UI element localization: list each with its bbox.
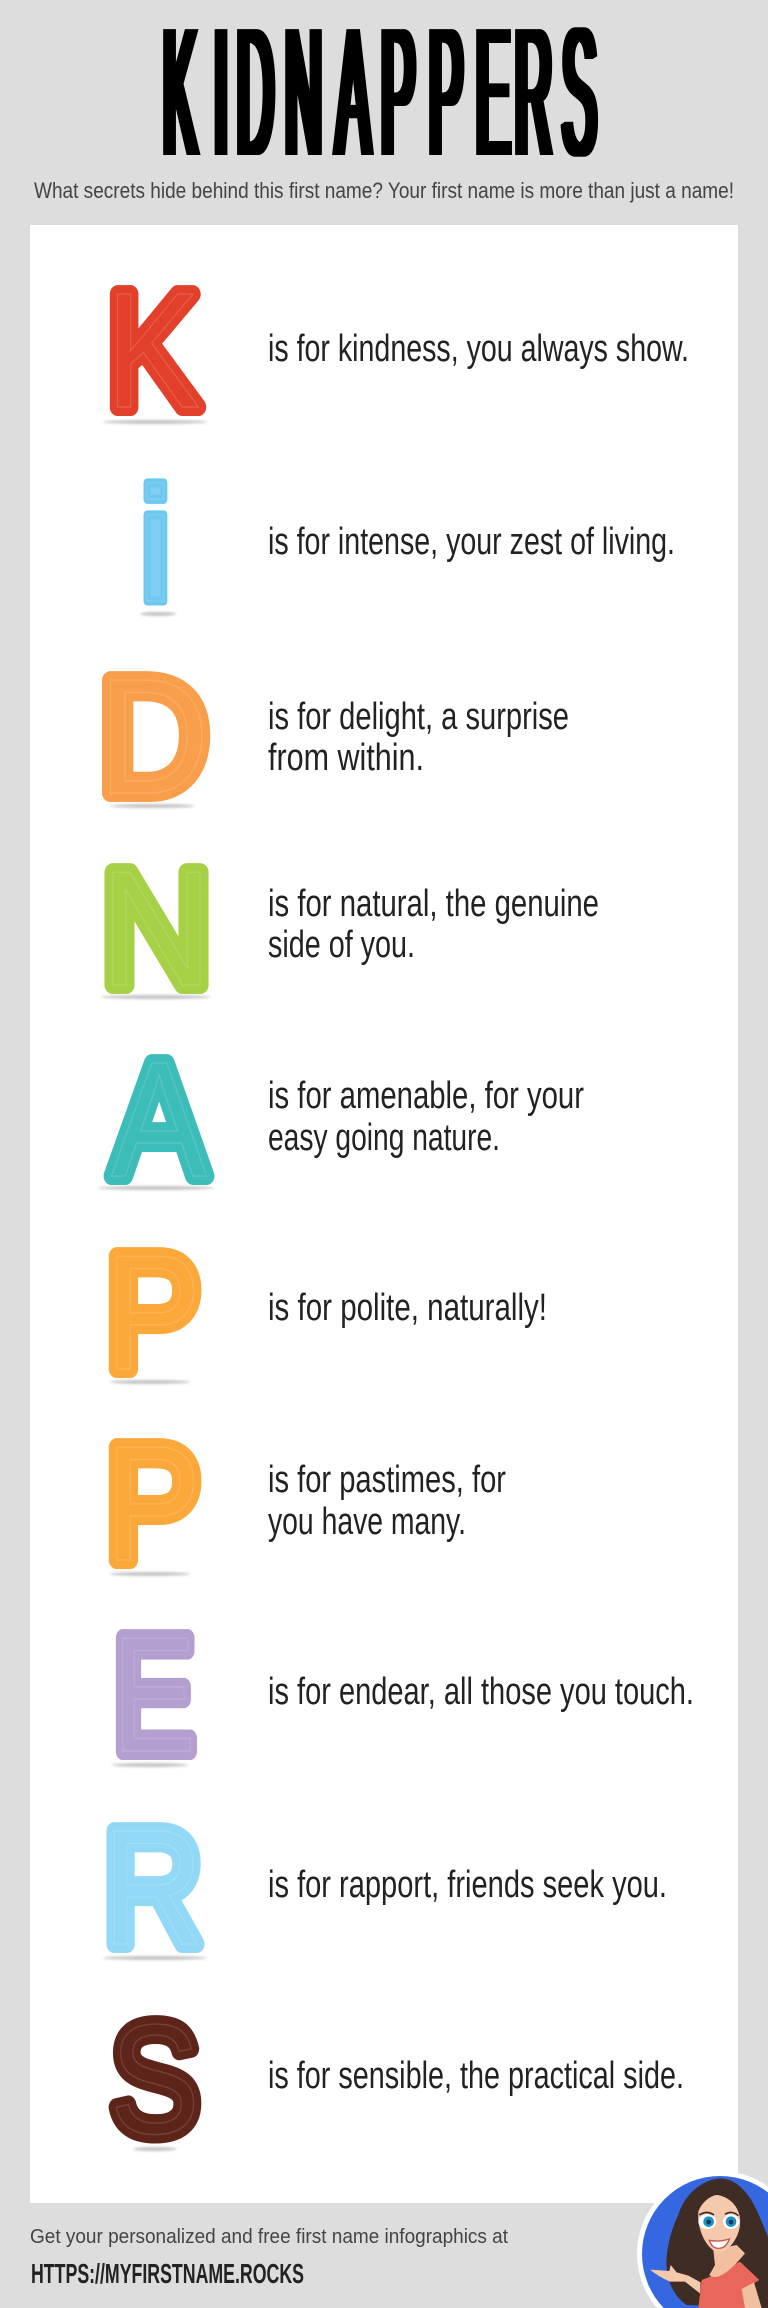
text: second P lines: you have many. xyxy=(268,1501,466,1543)
footer text: Get your personalized and free first name infographics at xyxy=(30,2226,508,2248)
icon: letter P second: P xyxy=(105,1411,201,1595)
icon: letter R: R xyxy=(103,1796,203,1980)
text: N lines: side of you. xyxy=(268,924,415,966)
shadow R xyxy=(103,1956,207,1960)
icon: letter P: P xyxy=(105,1220,201,1404)
icon: letter i: i xyxy=(138,454,173,636)
icon: letter A: A xyxy=(111,1028,207,1211)
shadow A xyxy=(98,1186,214,1190)
icon: letter N: N xyxy=(100,836,213,1020)
icon: letter E: E xyxy=(112,1602,196,1786)
icon: letter A: A xyxy=(111,1028,207,1211)
shadow E xyxy=(112,1763,188,1767)
shadow P second xyxy=(110,1572,190,1576)
text: N lines xyxy=(268,883,599,966)
shadow N xyxy=(101,995,211,999)
icon: letter P second: P xyxy=(105,1411,201,1595)
text: second P lines: is for pastimes, for xyxy=(268,1459,506,1501)
shadow D xyxy=(111,804,195,808)
text: N lines: is for natural, the genuine xyxy=(268,883,599,925)
icon: letter S: S xyxy=(110,1991,200,2166)
text: A lines xyxy=(268,1075,584,1159)
shadow i xyxy=(140,612,176,616)
text: P line: is for polite, naturally! xyxy=(268,1287,547,1329)
icon: letter N: N xyxy=(100,836,213,1020)
text: second P lines xyxy=(268,1459,506,1543)
text: A lines: easy going nature. xyxy=(268,1117,500,1159)
icon: letter D: D xyxy=(98,645,209,828)
icon: letter i: i xyxy=(138,454,173,636)
icon: letter K: K xyxy=(106,260,200,442)
text: D lines xyxy=(268,696,569,779)
shadow P xyxy=(110,1380,190,1384)
icon: letter P: P xyxy=(105,1220,201,1404)
avatar: woman in blue circle xyxy=(637,2171,768,2308)
icon: letter E: E xyxy=(112,1602,196,1786)
text: D lines: is for delight, a surprise xyxy=(268,696,569,738)
panel: white letter list xyxy=(30,225,738,2203)
footer url: HTTPS://MYFIRSTNAME.ROCKS xyxy=(31,2258,304,2289)
icon: letter R: R xyxy=(103,1796,203,1980)
text: A lines: is for amenable, for your xyxy=(268,1075,584,1117)
icon: letter D: D xyxy=(98,645,209,828)
icon: letter S: S xyxy=(110,1991,200,2166)
shadow S xyxy=(133,2147,177,2151)
icon: letter K: K xyxy=(106,260,200,442)
shadow K xyxy=(103,420,207,424)
text: D lines: from within. xyxy=(268,737,424,779)
